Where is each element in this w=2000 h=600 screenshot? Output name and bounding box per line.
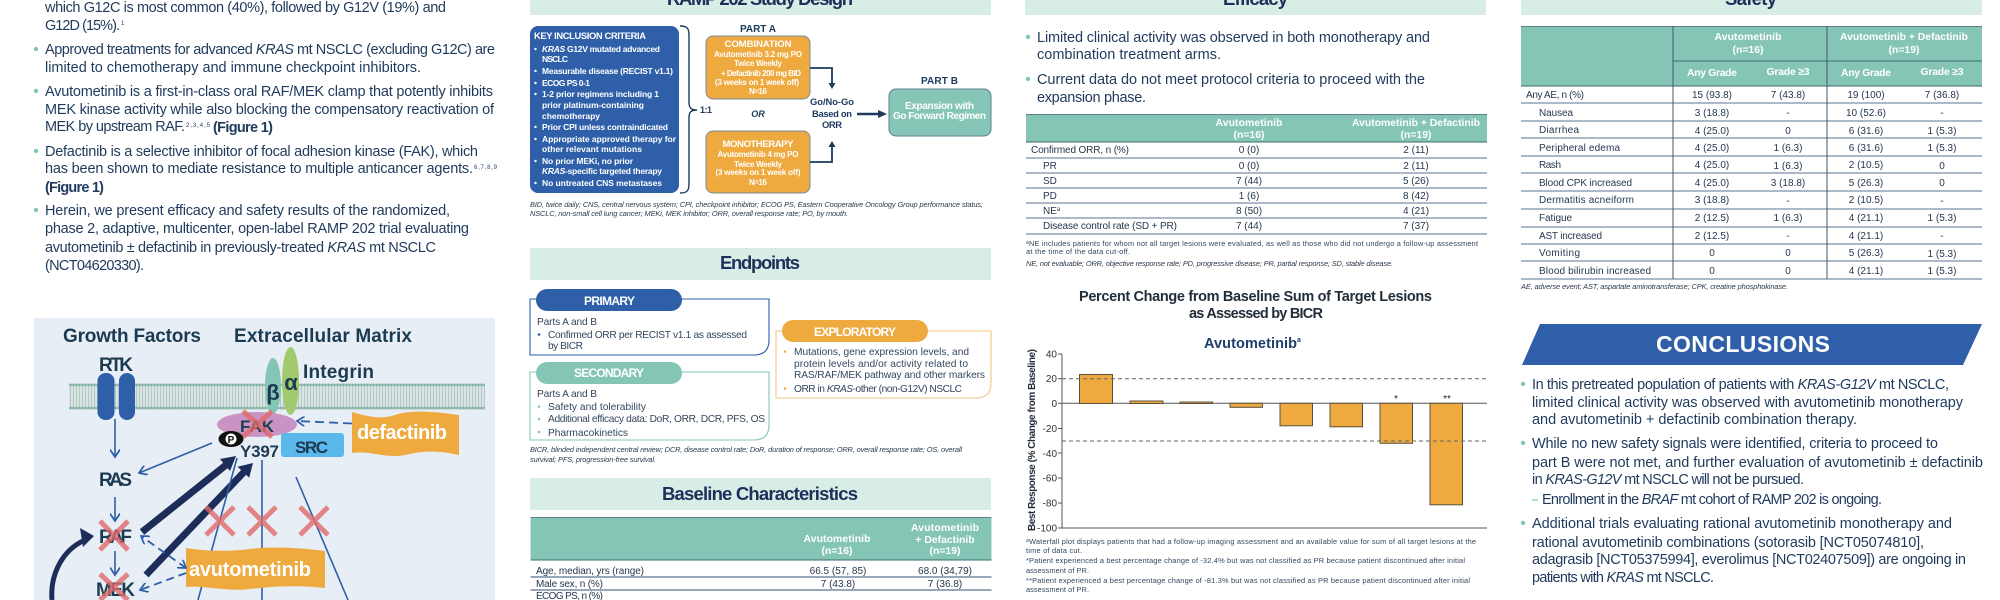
efficacy bullets: expansion phase. (1037, 90, 1146, 106)
randomization brace: 1:1 (700, 105, 712, 115)
key inclusion criteria box: Measurable disease (RECIST v1.1) (542, 66, 673, 76)
safety table: 5 (26.3) (1849, 248, 1883, 259)
safety table: - (1940, 108, 1944, 119)
monotherapy arm box: N=16 (749, 178, 768, 187)
safety table: 0 (1785, 266, 1791, 277)
safety table: 3 (18.8) (1695, 108, 1729, 119)
bars (1080, 374, 1462, 505)
chart subtitle: Avutometinib (1204, 336, 1297, 352)
downstream lines (198, 458, 348, 600)
footnote: chart notes (1026, 537, 1476, 594)
conclusion: limited activity: and avutometinib + defactinib combination therapy. (1532, 412, 1857, 428)
bullet: avutometinib mechanism (34, 84, 495, 136)
combination arm box: (3 weeks on 1 week off) (715, 78, 799, 87)
conclusion: safety and part B: in KRAS-G12V mt NSCLC will not be pursued. (1532, 472, 1804, 488)
safety table: 4 (21.1) (1849, 231, 1883, 242)
cell membrane (69, 383, 485, 410)
efficacy table: 5 (26) (1403, 176, 1429, 187)
footnote: abbreviations (530, 200, 983, 218)
safety table: 0 (1785, 126, 1791, 137)
bullet: avutometinib mechanism: (Figure 1) (213, 120, 273, 136)
key inclusion criteria box: KEY INCLUSION CRITERIA (534, 30, 646, 41)
response threshold lines (1062, 379, 1487, 441)
safety table: 0 (1939, 178, 1945, 189)
efficacy bullets: Current data do not meet protocol criteria to proceed with the (1037, 72, 1425, 88)
safety table: Any Grade (1841, 68, 1891, 79)
phosphate Y397: Y397 (240, 442, 279, 461)
y axis with ticks: 0 (1051, 399, 1057, 410)
footnote: safety abbreviations: AE, adverse event; AST, aspartate aminotransferase; CPK, creatine phosphokinase. (1520, 282, 1788, 291)
baseline table: (n=16) (822, 546, 852, 557)
RAF label with block: RAF (99, 527, 132, 548)
safety table: Any Grade (1687, 68, 1737, 79)
footnote: abbreviations: NSCLC, non-small cell lung cancer; MEKi, MEK inhibitor; ORR, overall response rate; PO, by mouth. (530, 209, 848, 218)
baseline table: Male sex, n (%) (536, 579, 603, 590)
go/no-go decision text: ORR (822, 119, 842, 130)
bullet: defactinib mechanism: Defactinib is a selective inhibitor of focal adhesion kinase (FAK), which (45, 144, 478, 160)
key inclusion criteria box: KRAS G12V mutated advanced (542, 44, 660, 54)
conclusion: safety and part B: part B were not met, and further evaluation of avutometinib ± defactinib (1532, 455, 1983, 471)
panel: conclusions (1521, 324, 1983, 586)
SRC (281, 433, 344, 457)
panel: safety (1520, 0, 1982, 291)
key inclusion criteria box: Appropriate approved therapy for (542, 134, 677, 144)
conclusion: limited activity: limited clinical activity was observed with avutometinib monotherapy (1532, 395, 1964, 411)
secondary endpoint: Additional efficacy data: DoR, ORR, DCR, PFS, OS (548, 414, 765, 425)
arrow: P to RAS (139, 443, 212, 473)
bullet: study aim (34, 203, 469, 274)
safety table: 0 (1939, 161, 1945, 172)
star annotations (1394, 394, 1451, 405)
dashed arrow: avutometinib to RAF (141, 536, 186, 568)
heading bar (1521, 0, 1982, 15)
arrow: monotherapy to decision (810, 141, 836, 162)
bullet: approved treatments (34, 42, 495, 76)
monotherapy arm box (706, 131, 810, 193)
y axis with ticks: 40 (1046, 350, 1057, 360)
arrow: combination to decision (810, 68, 836, 89)
bullet: avutometinib mechanism: MEK kinase activity while also blocking the compensatory reactivation of (45, 102, 495, 118)
bullet: defactinib mechanism: (Figure 1) (45, 180, 104, 196)
safety table: - (1786, 231, 1790, 242)
efficacy table: 2 (11) (1403, 161, 1429, 172)
integrin: β (266, 380, 280, 405)
primary endpoint: Confirmed ORR per RECIST v1.1 as assessed (548, 330, 747, 341)
key inclusion criteria box: chemotherapy (542, 111, 600, 121)
bullet: study aim: (NCT04620330). (45, 258, 144, 274)
monotherapy arm box: Avutometinib 4 mg PO (718, 150, 798, 159)
safety table: Diarrhea (1539, 125, 1579, 136)
avutometinib drug label: avutometinib (189, 559, 311, 581)
monotherapy arm box: (3 weeks on 1 week off) (716, 168, 801, 177)
conclusion: safety and part B: Enrollment in the BRAF mt cohort of RAMP 202 is ongoing. (1542, 492, 1882, 508)
safety table: 2 (12.5) (1695, 213, 1729, 224)
safety table: (n=16) (1733, 45, 1763, 56)
monotherapy arm box: Twice Weekly (734, 160, 783, 169)
chart title (1079, 289, 1432, 322)
baseline table: 68.0 (34,79) (918, 566, 972, 577)
safety table: Blood bilirubin increased (1539, 266, 1651, 277)
secondary endpoint: Safety and tolerability (548, 402, 647, 413)
go/no-go decision text (810, 96, 854, 130)
safety table: 3 (18.8) (1771, 178, 1805, 189)
efficacy table: Confirmed ORR, n (%) (1031, 145, 1129, 156)
bullet: defactinib mechanism: has been shown to mediate resistance to multiple anticancer agents. (45, 161, 473, 177)
conclusion: limited activity (1521, 377, 1964, 428)
waterfall chart (1027, 349, 1487, 534)
efficacy table: PR (1043, 161, 1057, 172)
bullet: avutometinib mechanism: MEK by upstream RAF. (45, 119, 185, 135)
OR label: OR (751, 109, 765, 119)
safety table: 4 (25.0) (1695, 160, 1729, 171)
bullet: defactinib mechanism: 6,7,8,9 (474, 165, 498, 171)
conclusion: safety and part B: While no new safety signals were identified, criteria to proceed to (1532, 436, 1938, 452)
key inclusion criteria box: ECOG PS 0-1 (542, 78, 590, 88)
heading bar (530, 0, 991, 15)
safety table: - (1940, 196, 1944, 207)
thick arrow: RAF to FAK (142, 456, 236, 532)
safety table: Blood CPK increased (1539, 178, 1632, 189)
bullet: defactinib mechanism (34, 144, 498, 196)
conclusions banner (1522, 324, 1982, 365)
primary endpoint (530, 289, 769, 355)
expansion box: Expansion with (905, 101, 974, 112)
heading bar (530, 248, 991, 280)
efficacy table (1026, 114, 1487, 234)
efficacy table: 8 (42) (1403, 191, 1429, 202)
panel: baseline characteristics (530, 478, 992, 600)
combination arm box: Twice Weekly (734, 59, 783, 68)
key inclusion criteria box: KRAS-specific targeted therapy (542, 166, 662, 176)
safety table: 0 (1709, 266, 1715, 277)
footnote: endpoint abbreviations: survival; PFS, progression-free survival. (530, 455, 656, 464)
efficacy table: (n=16) (1234, 130, 1264, 141)
dashed arrow: avutometinib to MEK (140, 573, 186, 590)
star annotations: ** (1443, 394, 1451, 405)
RTK receptor (98, 355, 135, 420)
safety table: - (1786, 196, 1790, 207)
baseline table: 7 (36.8) (928, 579, 962, 590)
safety table: 5 (26.3) (1849, 178, 1883, 189)
safety table (1521, 26, 1982, 279)
combination arm box: COMBINATION (724, 39, 792, 50)
safety table: 1 (5.3) (1928, 266, 1956, 277)
phosphate Y397 (218, 431, 279, 461)
safety table: 0 (1709, 248, 1715, 259)
panel: efficacy (1025, 0, 1487, 594)
key inclusion criteria box: No untreated CNS metastases (542, 178, 662, 188)
chart subtitle: a (1297, 337, 1301, 344)
expansion box (889, 89, 991, 136)
safety table: - (1940, 231, 1944, 242)
key inclusion criteria box: No prior MEKi, no prior (542, 156, 634, 166)
key inclusion criteria box: prior platinum-containing (542, 100, 644, 110)
conclusion: additional trials: patients with KRAS mt NSCLC. (1532, 570, 1714, 586)
panel: endpoints (530, 248, 991, 464)
chart title: Percent Change from Baseline Sum of Target Lesions (1079, 289, 1432, 305)
safety table: Avutometinib + Defactinib (1840, 32, 1968, 43)
safety table: 1 (5.3) (1928, 126, 1956, 137)
thick arrow: MEK to FAK (146, 463, 253, 575)
randomization brace (680, 26, 712, 193)
safety table: 6 (31.6) (1849, 126, 1883, 137)
baseline table: Age, median, yrs (range) (536, 566, 644, 577)
RTK receptor: RTK (99, 355, 133, 376)
safety table: 4 (25.0) (1695, 126, 1729, 137)
secondary endpoint (530, 362, 769, 440)
arrow: defactinib inhibits FAK (297, 421, 352, 424)
efficacy table: 4 (21) (1403, 206, 1429, 217)
safety table: Vomiting (1539, 248, 1580, 259)
safety table: 7 (36.8) (1925, 90, 1959, 101)
baseline table: 66.5 (57, 85) (810, 566, 866, 577)
combination arm box (706, 36, 810, 99)
go/no-go decision text: Go/No-Go (810, 96, 854, 107)
key inclusion criteria box: other relevant mutations (542, 144, 642, 154)
chart title: as Assessed by BICR (1189, 306, 1324, 322)
panel: RAMP 202 study design (530, 0, 991, 218)
y axis with ticks: -40 (1043, 449, 1057, 460)
SRC: SRC (295, 438, 328, 457)
bullet: study aim: avutometinib ± defactinib in previously-treated KRAS mt NSCLC (45, 240, 436, 256)
bullet: KRAS prevalence continuation: 1 (121, 21, 125, 27)
safety table: 4 (25.0) (1695, 178, 1729, 189)
footnote: chart notes: *Patient experienced a best percentage change of -32.4% but was not classified as PR because patient discontinued after initial (1026, 556, 1465, 565)
integrin: Integrin (303, 362, 374, 383)
safety table: Fatigue (1539, 213, 1572, 224)
footnote: efficacy notes: NE includes patients for whom not all target lesions were evaluated, as well as those who did not undergo a follow-up assessment (1029, 239, 1478, 248)
exploratory endpoint: protein levels and/or activity related to (794, 359, 968, 370)
footnote: endpoint abbreviations: BICR, blinded independent central review; DCR, disease control rate; DoR, duration of response; ORR, overall response rate; OS, overall (530, 445, 962, 454)
safety table: 10 (52.6) (1846, 108, 1886, 119)
bullet: study aim: Herein, we present efficacy and safety results of the randomized, (45, 203, 450, 219)
efficacy table: 1 (6) (1239, 191, 1259, 202)
safety table: 4 (21.1) (1849, 266, 1883, 277)
baseline table: Avutometinib (804, 534, 870, 545)
safety table: 1 (5.3) (1928, 249, 1956, 260)
efficacy table: Avutometinib (1216, 118, 1282, 129)
safety table: - (1786, 108, 1790, 119)
efficacy table: a (1057, 207, 1061, 213)
exploratory endpoint: ORR in KRAS-other (non-G12V) NSCLC (794, 384, 962, 395)
safety table: 4 (25.0) (1695, 143, 1729, 154)
bullet: KRAS prevalence continuation: G12D (15%). (45, 18, 120, 34)
efficacy table: Avutometinib + Defactinib (1352, 118, 1480, 129)
footnote: efficacy notes: NE, not evaluable; ORR, objective response rate; PD, progressive disease; PR, partial response; SD, stable disease. (1026, 259, 1393, 268)
safety table: 4 (21.1) (1849, 213, 1883, 224)
y axis label: Best Response (% Change from Baseline) (1027, 349, 1038, 531)
safety table: Rash (1539, 160, 1561, 171)
avutometinib drug label (186, 548, 325, 590)
conclusions banner: CONCLUSIONS (1656, 331, 1830, 357)
expansion box: Go Forward Regimen (893, 111, 986, 122)
safety table: 1 (5.3) (1928, 213, 1956, 224)
conclusion: safety and part B (1521, 436, 1983, 508)
heading bar: Baseline Characteristics (662, 483, 858, 504)
safety table: 2 (10.5) (1849, 195, 1883, 206)
exploratory endpoint: RAS/RAF/MEK pathway and other markers (794, 370, 985, 381)
conclusion: additional trials (1521, 516, 1966, 586)
efficacy table: Disease control rate (SD + PR) (1043, 221, 1177, 232)
monotherapy arm box: MONOTHERAPY (722, 139, 794, 150)
integrin (265, 347, 374, 415)
footnote: abbreviations: BID, twice daily; CNS, central nervous system; CPI, checkpoint inhibitor; ECOG PS, Eastern Cooperative Oncology Group performance status; (530, 200, 983, 209)
bullet: avutometinib mechanism: 2,3,4,5 (186, 123, 211, 129)
safety table: Grade ≥3 (1766, 67, 1810, 78)
exploratory endpoint: Mutations, gene expression levels, and (794, 347, 969, 358)
secondary endpoint: Parts A and B (537, 389, 597, 400)
arrow: RAF to MEK (114, 551, 116, 575)
safety table: 3 (18.8) (1695, 195, 1729, 206)
secondary endpoint: Pharmacokinetics (548, 428, 628, 439)
footnote: efficacy notes (1026, 239, 1478, 268)
efficacy table: 7 (37) (1403, 221, 1429, 232)
footnote: chart notes: a (1026, 538, 1029, 544)
part A label: PART A (740, 24, 776, 35)
y axis with ticks: -20 (1043, 424, 1057, 435)
heading: extracellular matrix: Extracellular Matrix (234, 326, 412, 347)
FAK: FAK (240, 417, 275, 436)
combination arm box: N=16 (749, 87, 768, 96)
efficacy table: 0 (0) (1239, 145, 1259, 156)
efficacy table: NE (1043, 206, 1057, 217)
combination arm box: Avutometinib 3.2 mg PO (714, 50, 802, 59)
arrow: decision to part B (857, 110, 887, 118)
heading bar: Endpoints (720, 252, 800, 273)
footnote: efficacy notes: a (1026, 240, 1029, 246)
secondary endpoint: SECONDARY (574, 366, 644, 380)
y axis with ticks: -100 (1037, 524, 1057, 534)
safety table: 1 (6.3) (1774, 213, 1802, 224)
exploratory endpoint: EXPLORATORY (814, 325, 896, 339)
footnote: chart notes: assessment of PR. (1026, 566, 1089, 575)
conclusion: limited activity: In this pretreated population of patients with KRAS-G12V mt NSCLC, (1532, 377, 1949, 393)
heading: growth factors: Growth Factors (63, 326, 201, 347)
footnote: endpoint abbreviations (530, 445, 962, 464)
safety table: 15 (93.8) (1692, 90, 1732, 101)
baseline table: 7 (43.8) (821, 579, 855, 590)
combination arm box: + Defactinib 200 mg BID (721, 69, 801, 78)
safety table: 1 (6.3) (1774, 143, 1802, 154)
safety table: 1 (6.3) (1774, 161, 1802, 172)
bullet: KRAS prevalence continuation: which G12C is most common (40%), followed by G12V (19%) and (44, 0, 446, 16)
baseline table: (n=19) (930, 546, 960, 557)
efficacy table: 7 (44) (1236, 176, 1262, 187)
bullet: approved treatments: Approved treatments for advanced KRAS mt NSCLC (excluding G12C) are (45, 42, 495, 58)
red crosses on downstream pathways (206, 507, 328, 535)
y axis with ticks: -60 (1043, 474, 1057, 484)
part B label: PART B (921, 76, 958, 87)
safety table: 19 (100) (1847, 90, 1885, 101)
safety table: Any AE, n (%) (1526, 90, 1584, 101)
conclusion: additional trials: rational avutometinib combinations (sotorasib [NCT05074810], (1532, 535, 1924, 551)
arrow: RAS to RAF (114, 497, 116, 521)
defactinib drug label: defactinib (357, 422, 447, 444)
efficacy bullets: combination treatment arms. (1037, 47, 1221, 63)
exploratory endpoint (776, 320, 991, 398)
bullet: study aim: phase 2, adaptive, multicenter, open-label RAMP 202 trial evaluating (45, 221, 469, 237)
arrow: RTK to RAS (114, 419, 116, 457)
safety table: Avutometinib (1714, 32, 1782, 43)
footnote: efficacy notes: at the time of the data cut-off. (1026, 247, 1130, 256)
y axis with ticks: 20 (1046, 374, 1057, 385)
safety table: 1 (5.3) (1928, 143, 1956, 154)
conclusion: additional trials: adagrasib [NCT05375994], everolimus [NCT02407509]) are ongoing in (1532, 552, 1966, 568)
efficacy bullets: Limited clinical activity was observed in both monotherapy and (1037, 30, 1430, 46)
key inclusion criteria box: 1-2 prior regimens including 1 (542, 89, 659, 99)
panel: figure 1 pathway diagram (34, 318, 495, 600)
y axis with ticks (1037, 350, 1487, 534)
primary endpoint: by BICR (548, 341, 583, 352)
panel: background text (34, 0, 498, 274)
conclusion: additional trials: Additional trials evaluating rational avutometinib monotherapy and (1532, 516, 1952, 532)
safety table: 6 (31.6) (1849, 143, 1883, 154)
footnote: chart notes: time of data cut. (1026, 546, 1082, 555)
footnote: chart notes: **Patient experienced a best percentage change of -81.3% but was not classified as PR because patient discontinued after initial (1026, 576, 1470, 585)
safety table: Peripheral edema (1539, 143, 1620, 154)
safety table: 0 (1785, 248, 1791, 259)
footnote: chart notes: Waterfall plot displays patients that had a follow-up imaging assessment and an available value for sum of all target lesions at the (1029, 537, 1476, 546)
star annotations: * (1394, 394, 1398, 405)
safety table: Dermatitis acneiform (1539, 195, 1634, 206)
key inclusion criteria box: Prior CPI unless contraindicated (542, 122, 668, 132)
safety table: AST increased (1539, 231, 1602, 242)
safety table: Grade ≥3 (1920, 67, 1964, 78)
bullet: approved treatments: limited to chemotherapy and immune checkpoint inhibitors. (45, 60, 421, 76)
baseline table: Avutometinib (911, 523, 979, 534)
efficacy table: PD (1043, 191, 1057, 202)
efficacy table: 0 (0) (1239, 161, 1259, 172)
key inclusion criteria box (530, 26, 679, 193)
primary endpoint: PRIMARY (584, 294, 635, 308)
baseline table: + Defactinib (915, 535, 975, 546)
efficacy table: 8 (50) (1236, 206, 1262, 217)
efficacy table: SD (1043, 176, 1057, 187)
efficacy table: (n=19) (1401, 130, 1431, 141)
bullet: avutometinib mechanism: Avutometinib is a first-in-class oral RAF/MEK clamp that potently inhibits (45, 84, 493, 100)
go/no-go decision text: Based on (812, 108, 852, 119)
y axis with ticks: -80 (1043, 498, 1057, 510)
efficacy bullets (1026, 30, 1430, 106)
safety table: 2 (10.5) (1849, 160, 1883, 171)
safety table: 7 (43.8) (1771, 90, 1805, 101)
key inclusion criteria box: NSCLC (542, 54, 568, 64)
primary endpoint: Parts A and B (537, 317, 597, 328)
defactinib drug label (352, 412, 459, 456)
efficacy table: 7 (44) (1236, 221, 1262, 232)
heading bar (530, 478, 991, 510)
phosphate Y397: P (228, 435, 235, 446)
safety table: Nausea (1539, 108, 1573, 119)
baseline table (530, 517, 992, 600)
integrin: α (284, 370, 298, 395)
safety table: 2 (12.5) (1695, 231, 1729, 242)
bullet: KRAS prevalence continuation (44, 0, 446, 34)
RAS label: RAS (99, 470, 132, 491)
safety table: (n=19) (1889, 45, 1919, 56)
footnote: chart notes: assessment of PR. (1026, 585, 1089, 594)
efficacy table: 2 (11) (1403, 145, 1429, 156)
FAK (217, 411, 297, 437)
curved feedback arrow (52, 528, 94, 600)
heading bar (1025, 0, 1486, 15)
